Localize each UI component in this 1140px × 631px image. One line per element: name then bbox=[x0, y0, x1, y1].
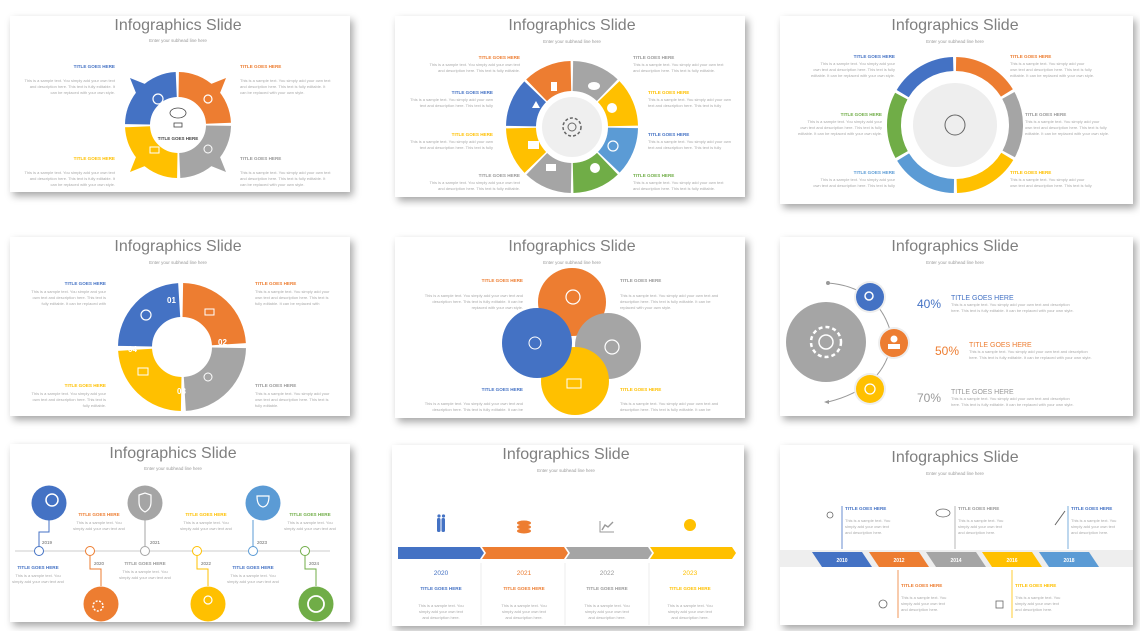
year columns: simply add your own text bbox=[668, 609, 713, 614]
text blocks bbox=[425, 278, 718, 412]
ring: 04 bbox=[128, 345, 137, 354]
text blocks: This is a sample text. You simply add your bbox=[821, 177, 896, 182]
text blocks: TITLE GOES HERE bbox=[1010, 170, 1051, 175]
text blocks bbox=[31, 281, 330, 408]
milestone texts: This is a sample text. You bbox=[958, 518, 1003, 523]
percent rows: This is a sample text. You simply add your own text and description bbox=[951, 396, 1070, 401]
text blocks: TITLE GOES HERE bbox=[65, 383, 106, 388]
text blocks bbox=[410, 55, 731, 191]
circles bbox=[502, 268, 641, 415]
text blocks: This is a sample text. You simply add your own text bbox=[240, 78, 331, 83]
milestone texts: This is a sample text. You bbox=[1015, 595, 1060, 600]
milestone texts: and description here. bbox=[901, 607, 938, 612]
text blocks: own text and description here. This text is fully bbox=[1010, 183, 1092, 188]
text blocks: TITLE GOES HERE bbox=[633, 55, 674, 60]
slide 5: overlapping circles: Infographics Slide bbox=[508, 238, 636, 255]
milestone texts: TITLE GOES HERE bbox=[1071, 506, 1112, 511]
timeline texts: TITLE GOES HERE bbox=[17, 565, 59, 570]
text blocks: description here. This text is fully editable. It can be bbox=[620, 299, 711, 304]
slide 4: numbered four arrows ring: Enter your subhead line here bbox=[149, 260, 207, 265]
text blocks: This is a sample text. You simply add your own bbox=[648, 139, 731, 144]
text blocks: and description here. This text is fully editable. It bbox=[240, 84, 326, 89]
year columns: 2023 bbox=[683, 570, 698, 577]
milestone texts: simply add your own text bbox=[958, 524, 1003, 529]
quadrant ring: TITLE GOES HERE bbox=[158, 136, 198, 141]
percent rows: 40% bbox=[917, 297, 941, 311]
text blocks: This is a sample text. You simple and your bbox=[31, 289, 107, 294]
text blocks bbox=[798, 54, 1109, 188]
timeline: 2019 bbox=[42, 540, 53, 545]
timeline texts: simply add your own text and bbox=[73, 526, 125, 531]
text blocks: TITLE GOES HERE bbox=[620, 278, 661, 283]
ring bbox=[128, 296, 230, 396]
text blocks: TITLE GOES HERE bbox=[240, 156, 281, 161]
text blocks: This is a sample text. You simply add your own bbox=[410, 97, 493, 102]
percent rows: TITLE GOES HERE bbox=[969, 342, 1032, 349]
text blocks: TITLE GOES HERE bbox=[854, 170, 895, 175]
percent rows: 50% bbox=[935, 344, 959, 358]
year columns: This is a sample text. You bbox=[667, 603, 713, 608]
text blocks: This is a sample text. You simply add your bbox=[32, 391, 107, 396]
year columns: This is a sample text. You bbox=[501, 603, 547, 608]
text blocks: description here. This text is fully editable. It can be bbox=[432, 407, 524, 412]
milestone texts: TITLE GOES HERE bbox=[958, 506, 999, 511]
ring: 02 bbox=[218, 338, 227, 347]
slide 6: gear with percentages: Infographics Slide bbox=[891, 238, 1019, 255]
slide 1: four quadrant cycle: Infographics Slide bbox=[114, 17, 242, 34]
text blocks: This is a sample text. You simply add your own bbox=[410, 139, 493, 144]
timeline texts: This is a sample text. You bbox=[183, 520, 229, 525]
text blocks: TITLE GOES HERE bbox=[854, 54, 895, 59]
timeline texts: simply add your own text and bbox=[284, 526, 336, 531]
band: 2016 bbox=[1006, 558, 1018, 564]
slide 4: numbered four arrows ring: Infographics Slide bbox=[114, 238, 242, 255]
band: 2010 bbox=[836, 558, 848, 564]
timeline bbox=[15, 486, 334, 622]
percent rows bbox=[917, 295, 1092, 407]
year columns: TITLE GOES HERE bbox=[669, 586, 711, 591]
text blocks: fully editable. bbox=[83, 403, 106, 408]
ring bbox=[500, 55, 644, 199]
ring: 03 bbox=[177, 387, 186, 396]
slide 7: circle timeline: Infographics Slide bbox=[109, 445, 237, 462]
text blocks: fully editable. bbox=[255, 403, 278, 408]
text blocks: replaced with your own style. bbox=[472, 305, 523, 310]
slide 8: arrow timeline bbox=[392, 445, 744, 626]
text blocks: This is a sample text. You simply add your own text bbox=[633, 180, 724, 185]
percent rows: This is a sample text. You simply add your own text and description bbox=[951, 302, 1070, 307]
text blocks: TITLE GOES HERE bbox=[479, 173, 520, 178]
percent rows: here. This text is fully editable. It can be replaced with your own style. bbox=[951, 308, 1074, 313]
timeline: 2020 bbox=[94, 561, 105, 566]
year columns bbox=[418, 570, 713, 620]
timeline texts: This is a sample text. You bbox=[287, 520, 333, 525]
slide 4: numbered four arrows ring bbox=[10, 237, 350, 416]
year columns: simply add your own text bbox=[419, 609, 464, 614]
slide 3: six segment ring: Infographics Slide bbox=[891, 17, 1019, 34]
slide 2: eight segment ring bbox=[395, 16, 745, 199]
percent rows: TITLE GOES HERE bbox=[951, 389, 1014, 396]
year columns: TITLE GOES HERE bbox=[503, 586, 545, 591]
year columns: 2021 bbox=[517, 570, 532, 577]
text blocks: text and description here. This text is fully bbox=[648, 145, 721, 150]
milestone texts: simply add your own text bbox=[901, 601, 946, 606]
text blocks: and description here. This text is fully editable. bbox=[438, 186, 520, 191]
text blocks: TITLE GOES HERE bbox=[74, 156, 115, 161]
text blocks: TITLE GOES HERE bbox=[240, 64, 281, 69]
band: 2018 bbox=[1063, 558, 1075, 564]
text blocks: TITLE GOES HERE bbox=[452, 90, 493, 95]
text blocks: This is a sample text. You simply add your own text and bbox=[425, 401, 523, 406]
timeline texts: simply add your own text and bbox=[12, 579, 64, 584]
milestone texts: simply add your own text bbox=[1015, 601, 1060, 606]
ring bbox=[871, 41, 1039, 209]
slide 2: eight segment ring: Enter your subhead line here bbox=[543, 39, 601, 44]
slide 6: gear with percentages bbox=[780, 237, 1133, 416]
milestone texts: simply add your own text bbox=[1071, 524, 1116, 529]
slide 2: eight segment ring: Infographics Slide bbox=[508, 17, 636, 34]
percent rows: This is a sample text. You simply add your own text and description bbox=[969, 349, 1088, 354]
text blocks: TITLE GOES HERE bbox=[255, 383, 296, 388]
text blocks: editable. It can be replaced with your own style. bbox=[1025, 131, 1109, 136]
text blocks: own text and description here. This text is fully bbox=[813, 67, 895, 72]
text blocks: text and description here. This text is fully bbox=[420, 145, 493, 150]
text blocks: text and description here. This text is fully bbox=[648, 103, 721, 108]
text blocks bbox=[24, 64, 331, 187]
text blocks: This is a sample text. You simply add your bbox=[1025, 119, 1100, 124]
slide 1: four quadrant cycle: Enter your subhead line here bbox=[149, 38, 207, 43]
text blocks: and description here. This text is fully editable. It bbox=[30, 84, 116, 89]
year columns: TITLE GOES HERE bbox=[586, 586, 628, 591]
text blocks: TITLE GOES HERE bbox=[255, 281, 296, 286]
text blocks: TITLE GOES HERE bbox=[482, 278, 523, 283]
timeline texts: This is a sample text. You bbox=[15, 573, 61, 578]
text blocks: own text and description here. This text is fully bbox=[1010, 67, 1092, 72]
text blocks: This is a sample text. You simply add your bbox=[821, 61, 896, 66]
text blocks: This is a sample text. You simply add your own text bbox=[430, 180, 521, 185]
year columns: and description here. bbox=[671, 615, 709, 620]
text blocks: and description here. This text is fully editable. bbox=[633, 68, 715, 73]
milestone texts: and description here. bbox=[958, 530, 995, 535]
text blocks: TITLE GOES HERE bbox=[841, 112, 882, 117]
year columns: simply add your own text bbox=[502, 609, 547, 614]
slide 3: six segment ring bbox=[780, 16, 1133, 209]
timeline texts: simply add your own text and bbox=[227, 579, 279, 584]
milestone texts: TITLE GOES HERE bbox=[1015, 583, 1056, 588]
gear circle and arc bbox=[786, 281, 910, 405]
text blocks: editable. It can be replaced with your own style. bbox=[798, 131, 882, 136]
slide 1: four quadrant cycle bbox=[10, 16, 350, 192]
text blocks: own text and description here. This text is bbox=[32, 397, 106, 402]
timeline texts: TITLE GOES HERE bbox=[185, 512, 227, 517]
slide 8: arrow timeline: Enter your subhead line here bbox=[537, 468, 595, 473]
text blocks: This is a sample text. You simply add your own text and bbox=[425, 293, 523, 298]
text blocks: own text and description here. This text is bbox=[255, 295, 329, 300]
text blocks: This is a sample text. You simply add your bbox=[808, 119, 883, 124]
percent rows: 70% bbox=[917, 391, 941, 405]
text blocks: This is a sample text. You simply add your own bbox=[648, 97, 731, 102]
slide 5: overlapping circles bbox=[395, 237, 745, 418]
text blocks: TITLE GOES HERE bbox=[633, 173, 674, 178]
text blocks: This is a sample text. You simply add your bbox=[255, 391, 330, 396]
milestone texts: TITLE GOES HERE bbox=[845, 506, 886, 511]
year columns: 2020 bbox=[434, 570, 449, 577]
milestone texts: and description here. bbox=[845, 530, 882, 535]
year columns: and description here. bbox=[505, 615, 543, 620]
milestone texts: This is a sample text. You bbox=[901, 595, 946, 600]
text blocks: This is a sample text. You simply add your own text and bbox=[620, 293, 718, 298]
text blocks: description here. This text is fully editable. It can be bbox=[620, 407, 711, 412]
year columns: TITLE GOES HERE bbox=[420, 586, 462, 591]
timeline texts: This is a sample text. You bbox=[122, 569, 168, 574]
timeline texts: simply add your own text and bbox=[180, 526, 232, 531]
slide 7: circle timeline: Enter your subhead line here bbox=[144, 466, 202, 471]
slide 3: six segment ring: Enter your subhead line here bbox=[926, 39, 984, 44]
percent rows: here. This text is fully editable. It can be replaced with your own style. bbox=[951, 402, 1074, 407]
quadrant ring bbox=[130, 78, 226, 172]
text blocks: fully editable. It can be replaced with bbox=[42, 301, 106, 306]
text blocks: can be replaced with your own style. bbox=[51, 90, 115, 95]
milestone texts: TITLE GOES HERE bbox=[901, 583, 942, 588]
text blocks: can be replaced with your own style. bbox=[240, 90, 304, 95]
timeline texts: TITLE GOES HERE bbox=[289, 512, 331, 517]
slide 5: overlapping circles: Enter your subhead line here bbox=[543, 260, 601, 265]
text blocks: This is a sample text. You simply add your own text bbox=[24, 170, 116, 175]
slide 9: parallelogram timeline: Infographics Slide bbox=[891, 449, 1019, 466]
text blocks: editable. It can be replaced with your own style. bbox=[1010, 73, 1094, 78]
text blocks: TITLE GOES HERE bbox=[479, 55, 520, 60]
text blocks: and description here. This text is fully editable. bbox=[633, 186, 715, 191]
text blocks: own text and description here. This text is fully bbox=[800, 125, 882, 130]
text blocks: text and description here. This text is fully bbox=[420, 103, 493, 108]
text blocks: TITLE GOES HERE bbox=[74, 64, 115, 69]
timeline texts: TITLE GOES HERE bbox=[232, 565, 274, 570]
timeline texts: simply add your own text and bbox=[119, 575, 171, 580]
timeline: 2021 bbox=[150, 540, 161, 545]
milestone texts: and description here. bbox=[1015, 607, 1052, 612]
milestone texts: and description here. bbox=[1071, 530, 1108, 535]
milestone texts: This is a sample text. You bbox=[1071, 518, 1116, 523]
text blocks: This is a sample text. You simply add your own text bbox=[240, 170, 331, 175]
text blocks: fully editable. It can be replaced with bbox=[255, 301, 319, 306]
timeline texts: TITLE GOES HERE bbox=[124, 561, 166, 566]
text blocks: can be replaced with your own style. bbox=[51, 182, 115, 187]
ring: 01 bbox=[167, 296, 176, 305]
text blocks: TITLE GOES HERE bbox=[1025, 112, 1066, 117]
milestone texts bbox=[845, 506, 1116, 612]
text blocks: TITLE GOES HERE bbox=[65, 281, 106, 286]
percent rows: here. This text is fully editable. It can be replaced with your own style. bbox=[969, 355, 1092, 360]
text blocks: TITLE GOES HERE bbox=[1010, 54, 1051, 59]
slide 7: circle timeline bbox=[10, 444, 350, 622]
band: 2014 bbox=[950, 558, 962, 564]
timeline texts bbox=[12, 512, 336, 584]
text blocks: and description here. This text is fully editable. bbox=[438, 68, 520, 73]
year columns: and description here. bbox=[588, 615, 626, 620]
band: 2012 bbox=[893, 558, 905, 564]
timeline: 2023 bbox=[257, 540, 268, 545]
milestone texts: simply add your own text bbox=[845, 524, 890, 529]
text blocks: own text and description here. This text is bbox=[32, 295, 106, 300]
timeline texts: TITLE GOES HERE bbox=[78, 512, 120, 517]
text blocks: and description here. This text is fully editable. It bbox=[30, 176, 116, 181]
chevron band bbox=[398, 514, 736, 625]
year columns: simply add your own text bbox=[585, 609, 630, 614]
timeline texts: This is a sample text. You bbox=[230, 573, 276, 578]
text blocks: description here. This text is fully editable. It can be bbox=[432, 299, 524, 304]
text blocks: own text and description here. This text is fully bbox=[813, 183, 895, 188]
year columns: and description here. bbox=[422, 615, 460, 620]
text blocks: TITLE GOES HERE bbox=[452, 132, 493, 137]
year columns: This is a sample text. You bbox=[418, 603, 464, 608]
text blocks: This is a sample text. You simply add your own text bbox=[24, 78, 116, 83]
text blocks: own text and description here. This text is bbox=[255, 397, 329, 402]
year columns: 2022 bbox=[600, 570, 615, 577]
text blocks: TITLE GOES HERE bbox=[648, 90, 689, 95]
text blocks: This is a sample text. You simply add your bbox=[255, 289, 330, 294]
timeline: 2022 bbox=[201, 561, 212, 566]
text blocks: TITLE GOES HERE bbox=[620, 387, 661, 392]
text blocks: This is a sample text. You simply add your bbox=[1010, 177, 1085, 182]
slide 9: parallelogram timeline bbox=[780, 445, 1133, 625]
percent rows: TITLE GOES HERE bbox=[951, 295, 1014, 302]
slide 9: parallelogram timeline: Enter your subhead line here bbox=[926, 471, 984, 476]
year columns: This is a sample text. You bbox=[584, 603, 630, 608]
text blocks: TITLE GOES HERE bbox=[648, 132, 689, 137]
timeline: 2024 bbox=[309, 561, 320, 566]
text blocks: own text and description here. This text is fully bbox=[1025, 125, 1107, 130]
text blocks: replaced with your own style. bbox=[620, 305, 671, 310]
timeline texts: This is a sample text. You bbox=[76, 520, 122, 525]
text blocks: can be replaced with your own style. bbox=[240, 182, 304, 187]
slide 8: arrow timeline: Infographics Slide bbox=[502, 446, 630, 463]
text blocks: This is a sample text. You simply add your own text and bbox=[620, 401, 718, 406]
slide 6: gear with percentages: Enter your subhead line here bbox=[926, 260, 984, 265]
band bbox=[780, 506, 1133, 618]
text blocks: This is a sample text. You simply add your own text bbox=[633, 62, 724, 67]
text blocks: editable. It can be replaced with your own style. bbox=[811, 73, 895, 78]
text blocks: This is a sample text. You simply add your own text bbox=[430, 62, 521, 67]
milestone texts: This is a sample text. You bbox=[845, 518, 890, 523]
text blocks: TITLE GOES HERE bbox=[482, 387, 523, 392]
text blocks: and description here. This text is fully editable. It bbox=[240, 176, 326, 181]
text blocks: This is a sample text. You simply add your bbox=[1010, 61, 1085, 66]
